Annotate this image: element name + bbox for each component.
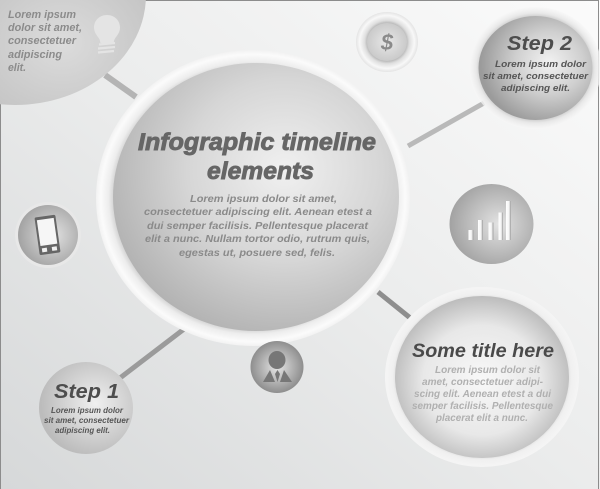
text: step 1 body: adipiscing elit. (55, 426, 110, 435)
heading: step 1: Step 1 (54, 381, 119, 403)
panel: some title here (385, 287, 579, 467)
text: title circle body: Lorem ipsum dolor sit (435, 365, 541, 376)
phone glyph (34, 215, 61, 255)
heading: step 2: Step 2 (507, 33, 572, 55)
suit (263, 370, 292, 382)
text: step 1 body: sit amet, consectetuer (44, 416, 130, 425)
icon: phone badge (15, 202, 81, 268)
connector: main circle to title circle (378, 292, 414, 321)
icon: dollar badge: $ (380, 30, 394, 55)
panel: main circle (96, 50, 410, 346)
text: step 1 body: Lorem ipsum dolor (51, 406, 124, 415)
text: step 2 body (483, 59, 589, 93)
text: main body: elit a nunc. Nullam tortor odio, rutrum quis, (145, 233, 370, 245)
panel: lightbulb corner (0, 0, 146, 105)
heading: infographic timeline elements: elements (207, 158, 314, 185)
text: title circle body (412, 365, 553, 424)
text: main body (144, 193, 372, 259)
text: main body: egestas ut, posuere sed, felis. (179, 247, 335, 259)
text: step 2 body: sit amet, consectetuer (483, 71, 589, 81)
text: step 1 body (44, 406, 130, 435)
icon: person badge (250, 341, 304, 393)
icon: lightbulb (94, 15, 120, 52)
icon: dollar badge (356, 12, 418, 72)
heading: infographic timeline elements: Infographic timeline (138, 129, 376, 156)
heading: some title here: Some title here (412, 341, 554, 362)
text: lightbulb panel: consectetuer (8, 35, 77, 47)
text: title circle body: amet, consectetuer adipi- (422, 377, 544, 388)
text: step 2 body: adipiscing elit. (501, 83, 570, 93)
heading: infographic timeline elements (138, 129, 376, 185)
connector: step 2 to main circle (408, 103, 484, 146)
panel: step 2 (470, 7, 600, 129)
panel: step 1 (39, 362, 133, 454)
text: lightbulb panel: adipiscing (8, 49, 62, 61)
text: main body: dui semper facilisis. Pellentesque placerat (147, 220, 369, 232)
icon: bar chart badge (450, 184, 534, 264)
text: title circle body: scing elit. Aenean etest a dui (414, 389, 551, 400)
connector: lightbulb to main circle (105, 75, 136, 97)
bar chart (468, 201, 511, 240)
text: lightbulb panel (8, 9, 82, 74)
text: main body: Lorem ipsum dolor sit amet, (190, 193, 337, 205)
text: title circle body: semper facilisis. Pellentesque (412, 401, 553, 412)
text: main body: consectetuer adipiscing elit. Aenean etest a (144, 206, 372, 218)
text: lightbulb panel: Lorem ipsum (8, 9, 76, 21)
text: lightbulb panel: elit. (8, 62, 26, 74)
connector: step 1 to main circle (120, 326, 188, 378)
text: lightbulb panel: dolor sit amet, (8, 22, 82, 34)
text: title circle body: placerat elit a nunc. (435, 413, 528, 424)
text: step 2 body: Lorem ipsum dolor (495, 59, 587, 69)
